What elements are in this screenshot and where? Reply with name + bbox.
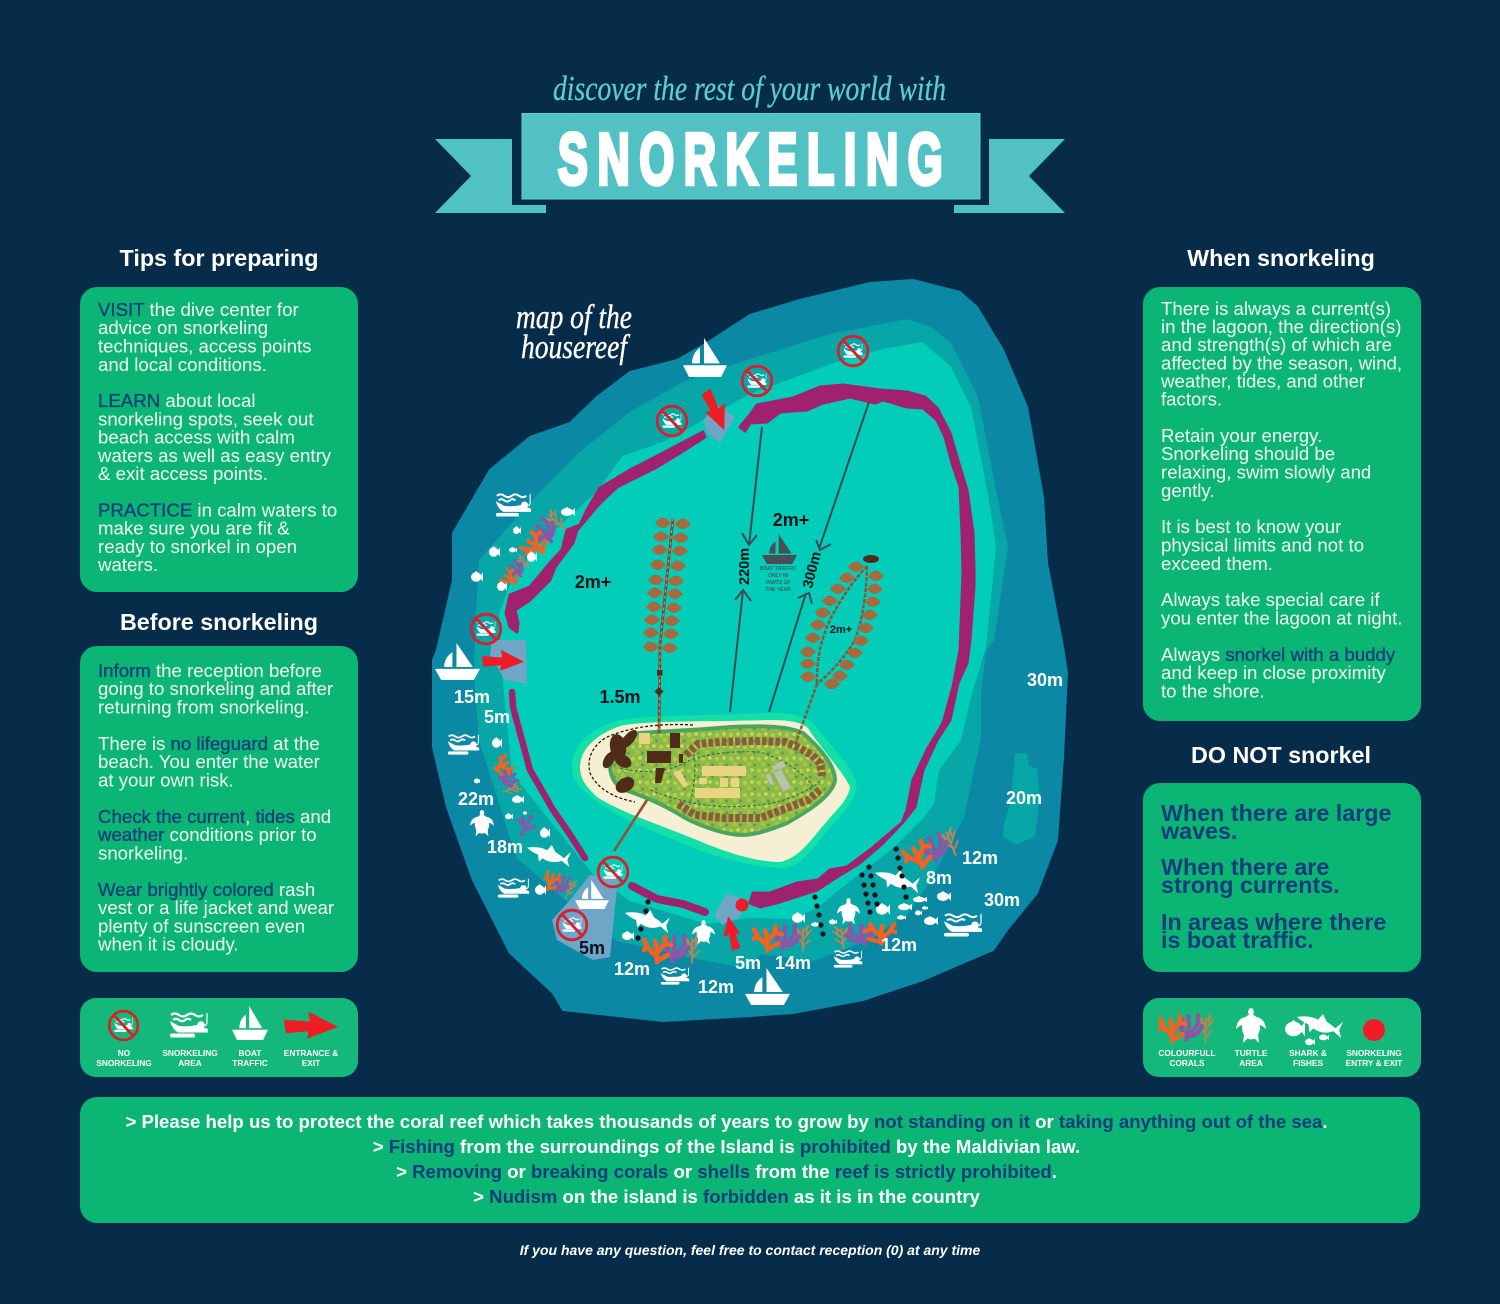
legend captions: SNORKELING	[96, 1058, 152, 1068]
snorkeling areas	[448, 494, 982, 985]
panel: tips for preparing: & exit access points.	[98, 463, 268, 484]
panel: before snorkeling: snorkeling.	[98, 842, 188, 864]
panel: before snorkeling: Inform the reception before	[98, 660, 322, 681]
legend captions: AREA	[1239, 1058, 1263, 1068]
legend icon: no snorkeling	[109, 1011, 138, 1040]
legend captions: COLOURFULL	[1158, 1048, 1216, 1058]
panel: tips for preparing: advice on snorkeling	[98, 317, 268, 338]
legend captions: TRAFFIC	[232, 1058, 268, 1068]
reef crest	[506, 385, 974, 912]
depth labels: white: 12m	[698, 977, 734, 997]
map caption	[516, 299, 632, 366]
legend icon: turtle	[1236, 1008, 1266, 1043]
heading: when snorkeling: When snorkeling	[1187, 245, 1375, 271]
legend captions	[1158, 1048, 1402, 1068]
distance label: 220m: 220m	[737, 548, 753, 585]
legend captions: ENTRANCE &	[284, 1048, 338, 1058]
legend icon: entrance and exit arrow	[284, 1012, 338, 1039]
fish	[471, 507, 951, 940]
boat traffic note: THE YEAR	[765, 587, 791, 593]
depth labels: white: 14m	[775, 953, 811, 973]
panel: when snorkeling: factors.	[1161, 388, 1222, 410]
map of the housereef	[433, 280, 1067, 1021]
panel: before snorkeling: Wear brightly colored rash	[98, 879, 315, 900]
panel: do not snorkel: When there are large	[1161, 800, 1391, 826]
panel: tips for preparing: waters.	[97, 554, 158, 575]
panel: when snorkeling: affected by the season, wind,	[1161, 352, 1402, 374]
panel: when snorkeling: you enter the lagoon at night.	[1161, 608, 1402, 628]
depth labels: white: 22m	[458, 789, 494, 809]
distance arrow: 220m	[730, 427, 762, 712]
legend captions: CORALS	[1169, 1058, 1205, 1068]
boat traffic note: ONLY IN	[768, 573, 788, 579]
deep patch 20m	[1005, 755, 1038, 842]
legend icon: entry and exit dot	[1363, 1019, 1385, 1041]
panel: do not snorkel	[1143, 783, 1421, 972]
lagoon	[500, 343, 995, 923]
legend captions: TURTLE	[1235, 1048, 1268, 1058]
depth labels: black	[575, 510, 852, 958]
turtles	[470, 810, 860, 944]
panel: when snorkeling	[1143, 287, 1421, 721]
heading: do not snorkel: DO NOT snorkel	[1191, 742, 1371, 768]
panel: when snorkeling: Always snorkel with a buddy	[1161, 644, 1395, 665]
panel: tips for preparing: make sure you are fit &	[98, 518, 290, 538]
panel: before snorkeling: plenty of sunscreen even	[98, 916, 305, 936]
panel: when snorkeling: physical limits and not to	[1161, 534, 1364, 556]
heading: before snorkeling: Before snorkeling	[120, 609, 318, 635]
entry patches	[490, 405, 745, 960]
jetty: bottom	[614, 800, 647, 851]
panel: tips for preparing: beach access with calm	[98, 426, 295, 448]
legend captions: SNORKELING	[1346, 1048, 1402, 1058]
panel: before snorkeling: at your own risk.	[98, 770, 234, 790]
panel: before snorkeling: weather conditions prior to	[98, 824, 317, 845]
legend captions: SNORKELING	[162, 1048, 218, 1058]
panel: when snorkeling: relaxing, swim slowly and	[1161, 462, 1371, 482]
depth labels: white: 5m	[484, 707, 510, 727]
panel: tips for preparing: waters as well as easy entry	[97, 445, 332, 466]
panel: when snorkeling: It is best to know your	[1161, 516, 1341, 537]
boat traffic note	[760, 534, 797, 593]
panel: protect the reef notice: > Fishing from the surroundings of the Island is prohibited by the Maldivian law.	[373, 1136, 1080, 1157]
panel: before snorkeling: Check the current, tides and	[98, 806, 331, 827]
snorkeling route dots	[635, 846, 909, 941]
depth labels: white: 20m	[1006, 788, 1042, 808]
buildings	[600, 727, 683, 796]
panel: when snorkeling: to the shore.	[1161, 680, 1265, 702]
depth labels: black: 2m+	[830, 624, 852, 636]
depth labels: white: 12m	[614, 959, 650, 979]
legend icon: corals	[1159, 1015, 1213, 1042]
panel: before snorkeling: when it is cloudy.	[97, 934, 239, 954]
tagline: discover the rest of your world with	[553, 69, 946, 108]
jetty: left	[643, 518, 691, 733]
depth labels: white: 15m	[454, 687, 490, 707]
map caption: housereef	[521, 329, 631, 366]
panel: do not snorkel: strong currents.	[1161, 872, 1340, 898]
panel: protect the reef notice: > Removing or breaking corals or shells from the reef is strictly prohibited.	[396, 1161, 1057, 1182]
title banner: SNORKELING	[558, 119, 952, 200]
legend: left	[80, 998, 358, 1077]
legend captions: AREA	[178, 1058, 202, 1068]
panel: before snorkeling	[80, 646, 358, 972]
panel: when snorkeling: and strength(s) of which are	[1161, 334, 1392, 355]
huts	[686, 741, 822, 776]
corals	[491, 508, 963, 963]
depth labels: white	[454, 670, 1063, 997]
panel: when snorkeling: in the lagoon, the direction(s)	[1161, 316, 1401, 337]
legend captions: ENTRY & EXIT	[1346, 1058, 1402, 1068]
reef outer water	[433, 280, 1067, 1021]
panel: before snorkeling: beach. You enter the water	[98, 751, 320, 772]
sharks	[527, 845, 920, 933]
panel: when snorkeling: and keep in close proximity	[1161, 662, 1387, 683]
legend captions: SHARK &	[1289, 1048, 1327, 1058]
depth labels: white: 18m	[487, 837, 523, 857]
legend captions: NO	[118, 1048, 131, 1058]
footer contact note: If you have any question, feel free to contact reception (0) at any time	[520, 1242, 980, 1258]
title banner	[435, 114, 1065, 213]
depth labels: white: 30m	[984, 890, 1020, 910]
island paths	[589, 725, 822, 807]
boats	[435, 338, 790, 1005]
panel: do not snorkel: is boat traffic.	[1161, 927, 1314, 953]
legend icon: boat traffic	[232, 1006, 268, 1040]
depth labels: black: 5m	[579, 938, 605, 958]
legend: right	[1143, 998, 1421, 1077]
panel: when snorkeling: Snorkeling should be	[1161, 443, 1335, 464]
panel: tips for preparing: VISIT the dive center for	[98, 299, 299, 320]
boat traffic note: PARTS OF	[766, 580, 791, 586]
legend icon: shark and fishes	[1285, 1014, 1343, 1045]
depth labels: white: 8m	[926, 868, 952, 888]
entry arrows	[482, 386, 748, 952]
panel: tips for preparing: PRACTICE in calm waters to	[98, 500, 337, 520]
panel: tips for preparing: and local conditions.	[98, 354, 267, 375]
panel: when snorkeling: weather, tides, and other	[1160, 370, 1365, 392]
panel: tips for preparing: snorkeling spots, seek out	[98, 408, 314, 430]
panel: tips for preparing: LEARN about local	[98, 390, 256, 411]
panel: protect the reef notice	[80, 1097, 1420, 1223]
panel: do not snorkel: waves.	[1160, 818, 1237, 844]
depth labels: black: 1.5m	[599, 687, 641, 707]
legend captions: FISHES	[1293, 1058, 1323, 1068]
distance label: 300m: 300m	[800, 550, 825, 590]
panel: protect the reef notice: > Nudism on the island is forbidden as it is in the country	[473, 1186, 981, 1207]
panel: do not snorkel: When there are	[1161, 854, 1329, 880]
panel: before snorkeling: There is no lifeguard at the	[98, 733, 320, 754]
jetty: right	[795, 555, 884, 745]
heading: tips for preparing: Tips for preparing	[120, 245, 318, 271]
depth labels: black: 2m+	[575, 572, 611, 592]
distance arrow: 300m	[769, 402, 869, 712]
reef middle water	[475, 320, 1007, 968]
panel: before snorkeling: returning from snorkeling.	[98, 696, 309, 718]
panel: when snorkeling: exceed them.	[1161, 553, 1273, 574]
panel: when snorkeling: gently.	[1161, 480, 1215, 501]
panel: tips for preparing: techniques, access points	[98, 336, 311, 356]
depth labels: black: 2m+	[773, 510, 809, 530]
panel: before snorkeling: going to snorkeling and after	[98, 678, 333, 699]
depth labels: white: 30m	[1027, 670, 1063, 690]
panel: do not snorkel: In areas where there	[1161, 909, 1386, 935]
depth labels: white: 12m	[962, 848, 998, 868]
panel: tips for preparing	[80, 287, 358, 592]
legend captions: EXIT	[302, 1058, 320, 1068]
panel: when snorkeling: There is always a current(s)	[1161, 298, 1391, 319]
legend captions: BOAT	[239, 1048, 261, 1058]
depth labels: white: 5m	[735, 953, 761, 973]
map caption: map of the	[516, 299, 632, 336]
legend icon: snorkeling area	[170, 1013, 208, 1038]
no snorkeling markers	[471, 336, 868, 940]
panel: protect the reef notice: > Please help us to protect the coral reef which takes thousands of years to grow by not standing on it or taking anything out of the sea.	[125, 1111, 1328, 1132]
boat traffic note: BOAT TRAFFIC	[760, 566, 797, 572]
panel: when snorkeling: Retain your energy.	[1161, 425, 1322, 446]
panel: when snorkeling: Always take special care if	[1161, 589, 1380, 610]
panel: tips for preparing: ready to snorkel in open	[98, 536, 297, 557]
depth labels: white: 12m	[881, 935, 917, 955]
panel: before snorkeling: vest or a life jacket and wear	[98, 897, 334, 918]
island	[572, 713, 857, 868]
legend captions	[96, 1048, 338, 1068]
